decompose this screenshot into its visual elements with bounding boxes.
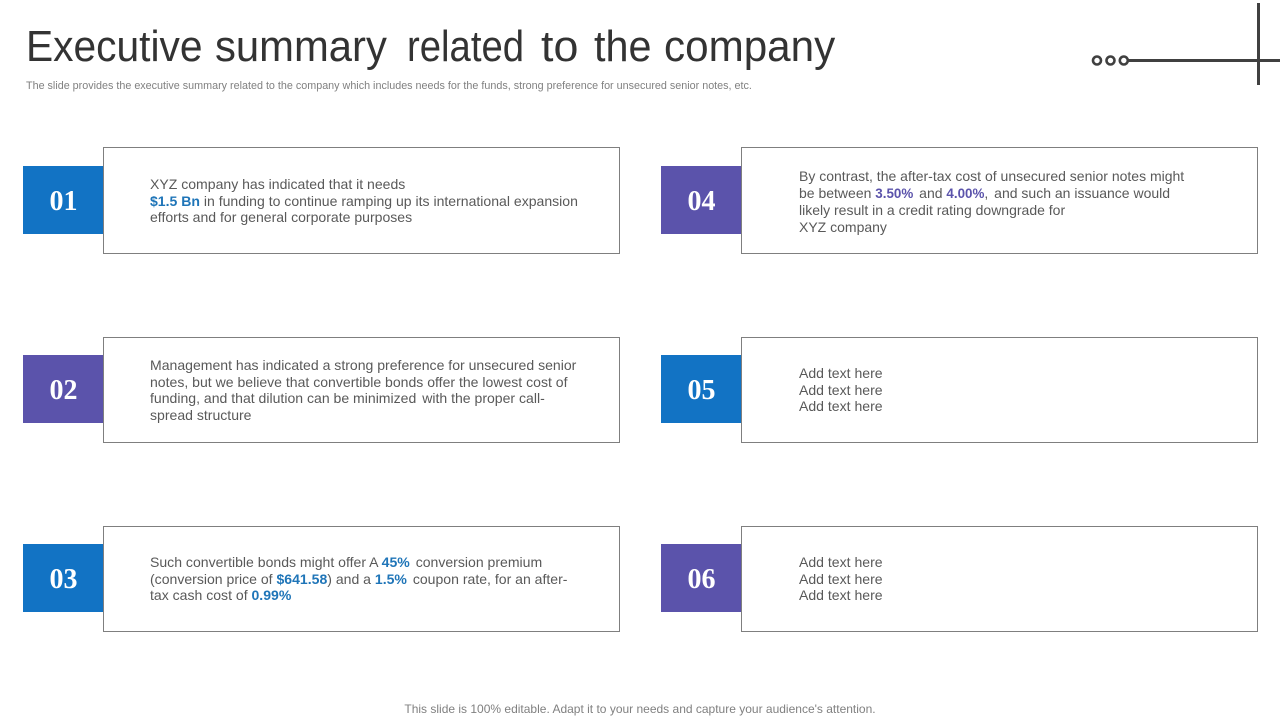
text box 05 <box>741 337 1258 443</box>
panel: item 05 <box>661 337 1258 443</box>
text 02: Management has indicated a strong preference for unsecured senior <box>150 357 576 373</box>
number badge 05: 05 <box>688 375 716 406</box>
title: related <box>407 23 524 71</box>
footer note: This slide is 100% editable. Adapt it to your needs and capture your audience's attention. <box>404 702 876 716</box>
title: company <box>664 23 835 71</box>
title: Executive <box>26 23 203 71</box>
text 03: Such convertible bonds might offer A 45% conversion premium <box>150 554 542 570</box>
number badge 04: 04 <box>688 186 716 217</box>
text box 04 <box>741 147 1258 254</box>
number badge 04 <box>661 166 742 234</box>
text 05 <box>799 365 883 414</box>
number badge 03: 03 <box>50 564 78 595</box>
icon: decorative header line with three rings <box>1092 3 1280 85</box>
text 01: XYZ company has indicated that it needs <box>150 176 405 192</box>
text 04: be between 3.50% and 4.00%, and such an issuance would <box>799 185 1170 201</box>
title: the <box>594 23 651 71</box>
panel: item 03 <box>23 526 620 632</box>
text 02 <box>150 357 576 423</box>
title <box>26 23 836 71</box>
text 01: $1.5 Bn in funding to continue ramping up its international expansion <box>150 193 578 209</box>
text 04: likely result in a credit rating downgrade for <box>799 202 1065 218</box>
text 06: Add text here <box>799 587 883 603</box>
panel: item 02 <box>23 337 620 443</box>
title: summary <box>215 23 387 71</box>
number badge 03 <box>23 544 104 612</box>
text 01: efforts and for general corporate purposes <box>150 209 412 225</box>
text 06: Add text here <box>799 571 883 587</box>
text 03: tax cash cost of 0.99% <box>150 587 291 603</box>
text 05: Add text here <box>799 382 883 398</box>
text 02: spread structure <box>150 407 252 423</box>
title: to <box>541 23 578 71</box>
text 02: notes, but we believe that convertible bonds offer the lowest cost of <box>150 374 568 390</box>
text 03: (conversion price of $641.58) and a 1.5% coupon rate, for an after- <box>150 571 567 587</box>
panel: item 04 <box>661 147 1258 254</box>
number badge 01 <box>23 166 104 234</box>
number badge 05 <box>661 355 742 423</box>
text 04: XYZ company <box>799 219 887 235</box>
text box 02 <box>103 337 620 443</box>
text 01 <box>150 176 578 225</box>
number badge 06: 06 <box>688 564 716 595</box>
number badge 02 <box>23 355 104 423</box>
text 05: Add text here <box>799 398 883 414</box>
panel: item 06 <box>661 526 1258 632</box>
text box 03 <box>103 526 620 632</box>
subtitle: The slide provides the executive summary related to the company which includes needs for the funds, strong preference for unsecured senior notes, etc. <box>26 80 752 92</box>
number badge 06 <box>661 544 742 612</box>
text box 01 <box>103 147 620 254</box>
text box 06 <box>741 526 1258 632</box>
text 04 <box>799 168 1184 235</box>
panel: item 01 <box>23 147 620 254</box>
text 04: By contrast, the after-tax cost of unsecured senior notes might <box>799 168 1184 184</box>
text 03 <box>150 554 567 603</box>
number badge 01: 01 <box>50 186 78 217</box>
text 06: Add text here <box>799 554 883 570</box>
text 02: funding, and that dilution can be minimized with the proper call- <box>150 390 545 406</box>
number badge 02: 02 <box>50 375 78 406</box>
text 06 <box>799 554 883 603</box>
text 05: Add text here <box>799 365 883 381</box>
